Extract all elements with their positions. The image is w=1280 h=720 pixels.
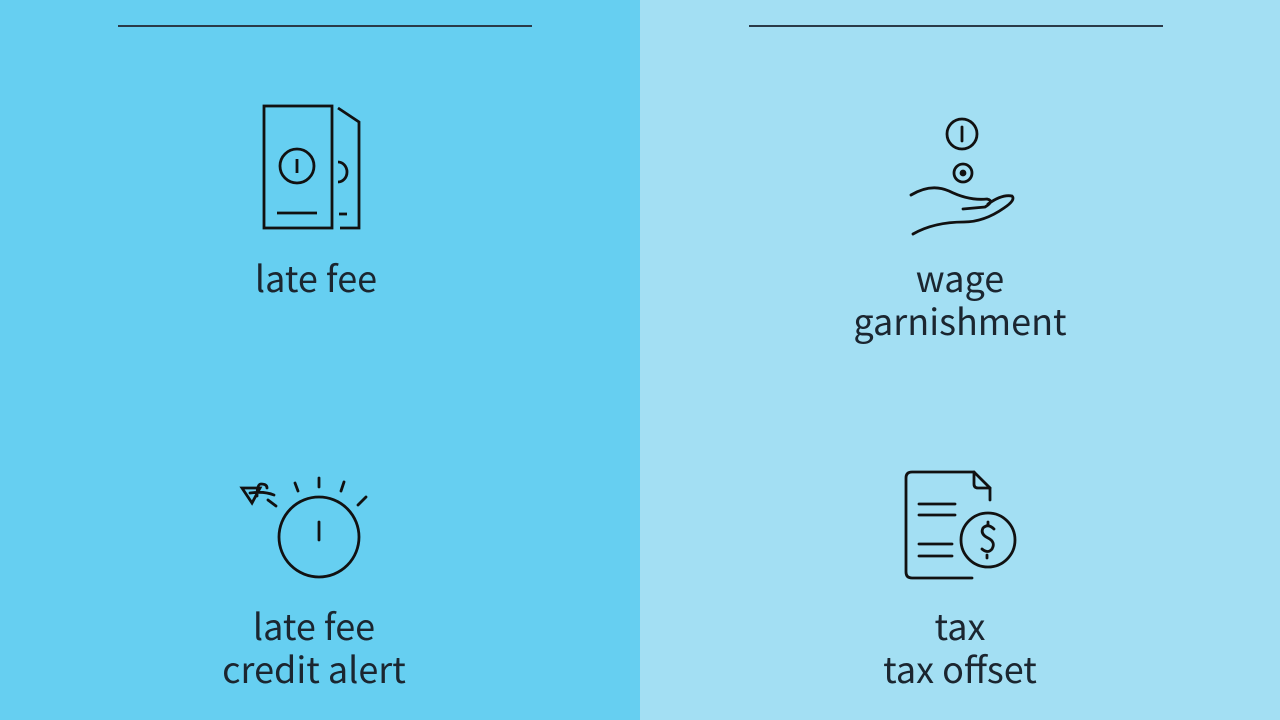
text: wage garnishment: garnishment <box>853 294 1067 346</box>
text: wage garnishment: wage <box>916 251 1004 303</box>
panel: left <box>0 0 640 720</box>
text: late fee credit alert: late fee <box>253 599 375 651</box>
icon: tax document <box>904 470 1016 580</box>
text: tax offset: tax <box>935 599 985 651</box>
text: tax offset: tax offset <box>883 642 1037 694</box>
text: late fee: late fee <box>255 251 377 303</box>
text: tax offset <box>883 599 1037 694</box>
text: wage garnishment <box>853 251 1067 346</box>
icon: hand with coins <box>910 118 1014 236</box>
text: late fee credit alert: credit alert <box>222 642 406 694</box>
panel: right <box>640 0 1280 720</box>
icon: document with coin <box>262 104 360 230</box>
icon: clock alert <box>239 476 368 578</box>
text: late fee credit alert <box>222 599 406 694</box>
